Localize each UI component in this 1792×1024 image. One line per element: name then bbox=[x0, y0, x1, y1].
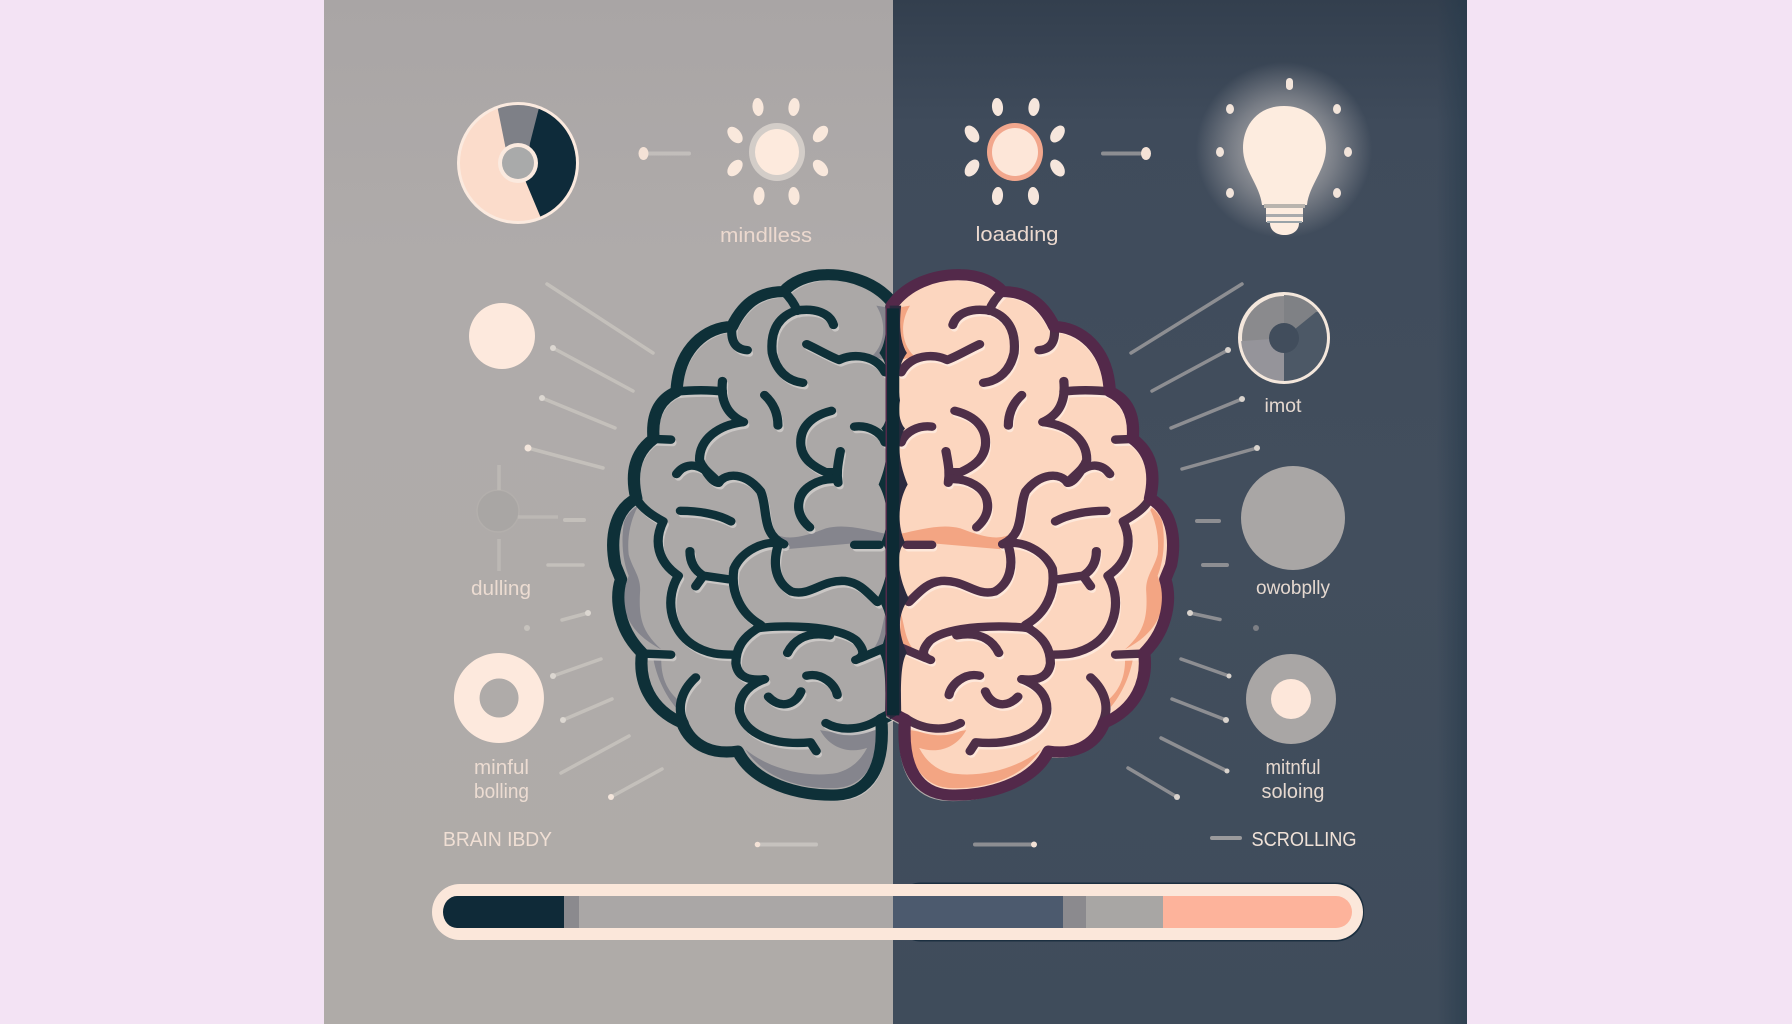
connector: bottom left bbox=[755, 842, 818, 847]
label: BRAIN IBDY: BRAIN IBDY bbox=[443, 829, 552, 851]
bar segments bbox=[443, 896, 1352, 928]
panel: right dark half bbox=[893, 0, 1467, 1024]
label: SCROLLING: SCROLLING bbox=[1252, 829, 1356, 851]
icon: left donut bbox=[454, 653, 544, 743]
label: mitnful soloing: soloing bbox=[1262, 781, 1324, 803]
brain bbox=[613, 275, 1173, 799]
label: mitnful soloing bbox=[1262, 757, 1324, 803]
connector: bottom right bbox=[973, 842, 1037, 848]
label: loaading: loaading bbox=[976, 224, 1058, 246]
icon: faded left dial bbox=[477, 465, 558, 571]
label: dulling: dulling bbox=[471, 578, 531, 600]
connector: right top bbox=[1101, 147, 1151, 160]
icon: right ring dial bbox=[1238, 292, 1330, 384]
label: owobplly: owobplly bbox=[1256, 578, 1330, 599]
label: minful bolling bbox=[474, 757, 529, 803]
left hemisphere bbox=[613, 275, 897, 799]
label: minful bolling: minful bbox=[474, 757, 529, 779]
right hemisphere bbox=[889, 275, 1173, 799]
central fissure bbox=[887, 308, 899, 715]
icon: right sun bbox=[962, 97, 1068, 206]
icon: left sun bbox=[724, 97, 831, 206]
dash before SCROLLING bbox=[1210, 836, 1242, 840]
label: mitnful soloing: mitnful bbox=[1266, 757, 1320, 779]
rays: left side of brain bbox=[524, 284, 662, 800]
progress bar bbox=[432, 882, 1364, 942]
connector: left top bbox=[638, 147, 691, 160]
label: imot: imot bbox=[1264, 396, 1302, 417]
icon: right donut bbox=[1246, 654, 1336, 744]
icon: glowing light bulb bbox=[1196, 62, 1372, 238]
icon: left pale circle bbox=[469, 303, 535, 369]
panel: left grey half bbox=[324, 0, 893, 1024]
icon: left pie disc bbox=[457, 102, 579, 224]
icon: right grey circle bbox=[1241, 466, 1345, 570]
label: mindlless: mindlless bbox=[720, 225, 812, 247]
label: minful bolling: bolling bbox=[474, 781, 529, 803]
rays: right side of brain bbox=[1128, 284, 1260, 800]
